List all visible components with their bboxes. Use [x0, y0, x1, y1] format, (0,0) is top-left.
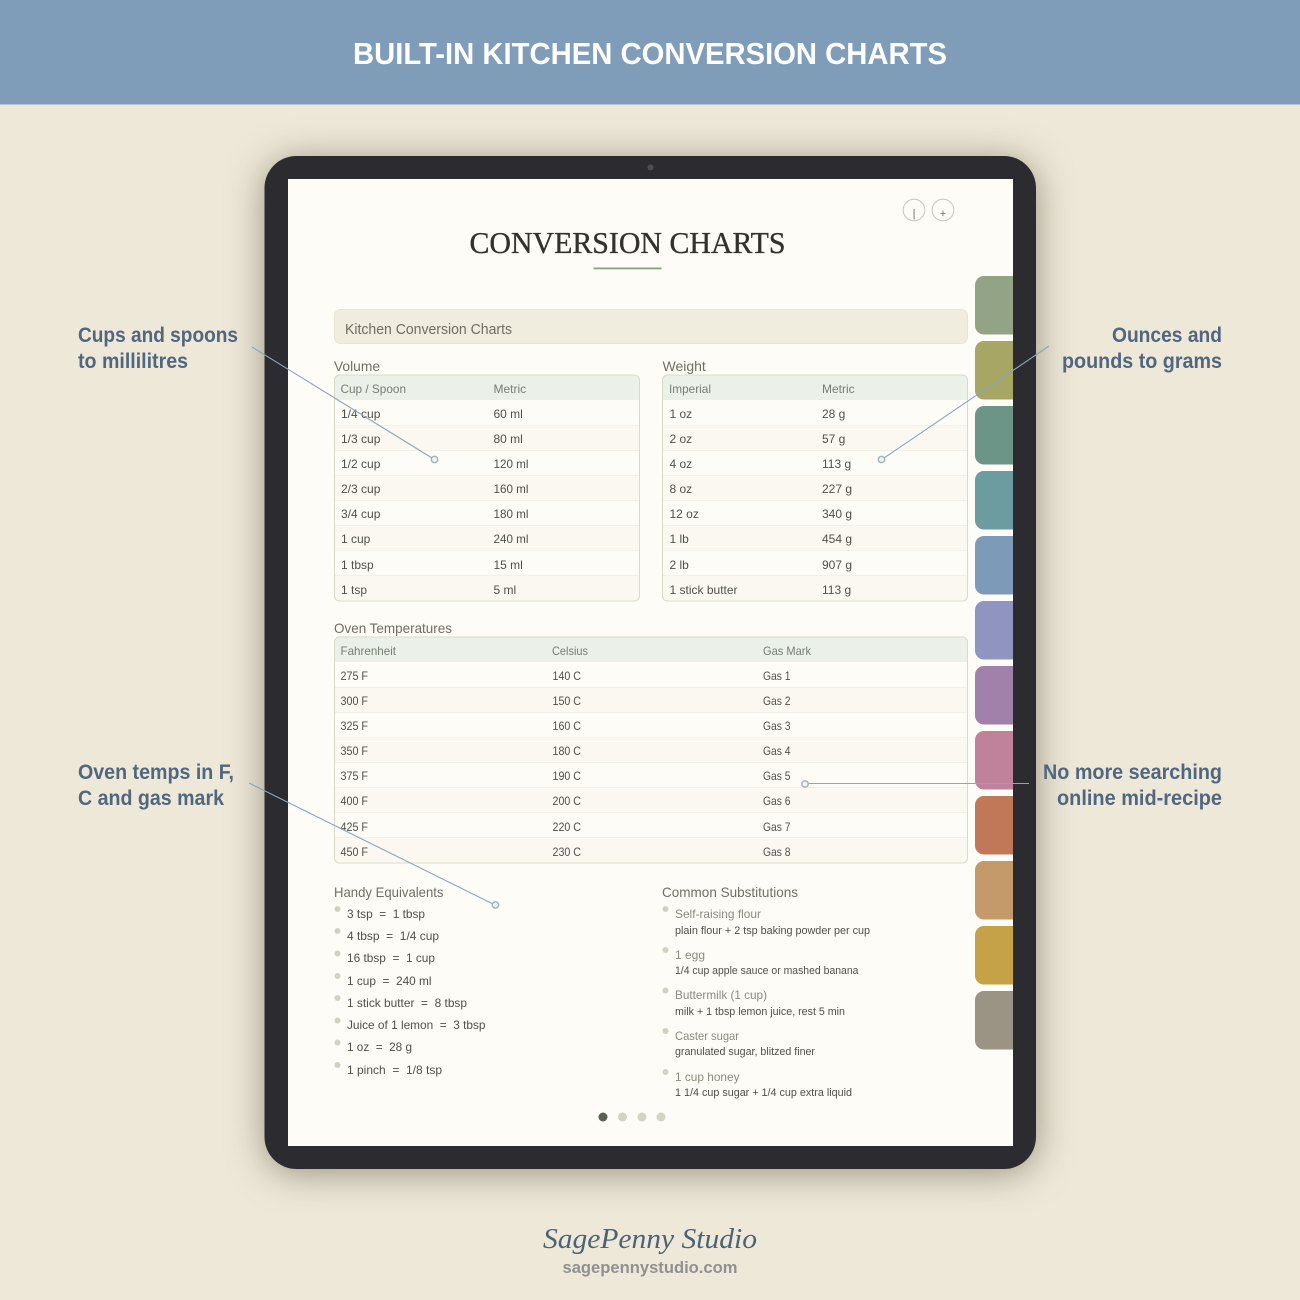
tablet drop shadow [264, 156, 1036, 1169]
weight table: 454 g [822, 532, 852, 546]
callout: no more searching: No more searching [1043, 760, 1222, 784]
weight table: 12 oz [670, 507, 699, 521]
page controls: | [913, 208, 915, 220]
oven temperatures table: 350 F [340, 744, 368, 758]
oven temperatures table: Celsius [552, 644, 588, 658]
footer url: sagepennystudio.com [562, 1258, 738, 1277]
section bar: Kitchen Conversion Charts [345, 322, 512, 338]
volume table [334, 358, 640, 601]
oven temperatures table: Gas 6 [763, 794, 791, 808]
oven temperatures table: Fahrenheit [340, 644, 397, 658]
weight table: 227 g [822, 482, 852, 496]
common substitutions list: Self-raising flour [675, 907, 761, 921]
weight table: Metric [822, 382, 855, 396]
handy equivalents list: Handy Equivalents [334, 884, 444, 900]
common substitutions list: 1 1/4 cup sugar + 1/4 cup extra liquid [675, 1087, 852, 1099]
callout: oven temps: C and gas mark [78, 786, 224, 810]
callout: cups and spoons [78, 323, 438, 463]
volume table: 1 cup [341, 532, 371, 546]
oven temperatures table: Gas 3 [763, 719, 791, 733]
callout: oven temps [78, 760, 499, 908]
callout: cups and spoons: Cups and spoons [78, 323, 238, 347]
weight table: 1 oz [670, 407, 692, 421]
oven temperatures table: 140 C [552, 669, 581, 683]
footer brand [543, 1223, 757, 1277]
volume table: 60 ml [494, 407, 523, 421]
oven temperatures table: Gas 2 [763, 694, 791, 708]
header banner [0, 0, 1300, 104]
weight table: 1 stick butter [670, 583, 738, 597]
common substitutions list: 1 egg [675, 948, 705, 962]
oven temperatures table: Gas 1 [763, 669, 791, 683]
oven temperatures table: 325 F [340, 719, 368, 733]
page controls: + [940, 208, 946, 220]
handy equivalents list: 16 tbsp = 1 cup [347, 951, 435, 965]
oven temperatures table: 300 F [340, 694, 368, 708]
common substitutions list: granulated sugar, blitzed finer [675, 1046, 815, 1058]
weight table: Weight [662, 358, 706, 374]
page controls [903, 199, 954, 221]
oven temperatures table: 200 C [552, 794, 581, 808]
oven temperatures table: Gas 4 [763, 744, 791, 758]
oven temperatures table: 220 C [552, 820, 581, 834]
volume table: 1/2 cup [341, 457, 381, 471]
common substitutions list: Common Substitutions [662, 884, 798, 900]
volume table: 3/4 cup [341, 507, 381, 521]
volume table: 5 ml [494, 583, 516, 597]
oven temperatures table: 375 F [340, 769, 368, 783]
weight table: 907 g [822, 558, 852, 572]
volume table: 1 tbsp [341, 558, 374, 572]
oven temperatures table: Oven Temperatures [334, 620, 452, 636]
handy equivalents list [334, 884, 486, 1077]
oven temperatures table: 230 C [552, 845, 581, 859]
oven temperatures table: 150 C [552, 694, 581, 708]
oven temperatures table: Gas 5 [763, 769, 791, 783]
pagination dots [598, 1112, 666, 1122]
callout: ounces and pounds: Ounces and [1112, 323, 1222, 347]
tablet device [264, 156, 1036, 1169]
weight table: 4 oz [670, 457, 692, 471]
volume table: Volume [334, 358, 380, 374]
volume table: Metric [494, 382, 526, 396]
volume table: 15 ml [494, 558, 523, 572]
common substitutions list: 1 cup honey [675, 1070, 740, 1084]
weight table [662, 358, 968, 601]
oven temperatures table [334, 620, 968, 863]
volume table: 1 tsp [341, 583, 367, 597]
weight table: 2 lb [670, 558, 689, 572]
common substitutions list: 1/4 cup apple sauce or mashed banana [675, 965, 859, 977]
page title: CONVERSION CHARTS [470, 225, 786, 260]
oven temperatures table: 400 F [340, 794, 368, 808]
handy equivalents list: 3 tsp = 1 tbsp [347, 907, 425, 921]
oven temperatures table: 425 F [340, 820, 368, 834]
oven temperatures table: 190 C [552, 769, 581, 783]
weight table: 2 oz [670, 432, 692, 446]
oven temperatures table: Gas 7 [763, 820, 791, 834]
weight table: Imperial [669, 382, 711, 396]
common substitutions list: Caster sugar [675, 1029, 739, 1043]
callout: no more searching: online mid-recipe [1057, 786, 1222, 810]
footer brand: SagePenny Studio [543, 1223, 757, 1255]
weight table: 1 lb [670, 532, 689, 546]
oven temperatures table: 450 F [340, 845, 368, 859]
oven temperatures table: Gas 8 [763, 845, 791, 859]
oven temperatures table: Gas Mark [763, 644, 812, 658]
weight table: 113 g [822, 457, 851, 471]
weight table: 28 g [822, 407, 845, 421]
callout: oven temps: Oven temps in F, [78, 760, 234, 784]
callout: ounces and pounds [878, 323, 1222, 463]
weight table: 8 oz [670, 482, 692, 496]
banner title: BUILT-IN KITCHEN CONVERSION CHARTS [353, 36, 947, 71]
common substitutions list: milk + 1 tbsp lemon juice, rest 5 min [675, 1006, 845, 1018]
oven temperatures table: 275 F [340, 669, 368, 683]
oven temperatures table: 160 C [552, 719, 581, 733]
volume table: 1/4 cup [341, 407, 381, 421]
callout: no more searching [802, 760, 1222, 810]
handy equivalents list: Juice of 1 lemon = 3 tbsp [347, 1018, 486, 1032]
oven temperatures table: 180 C [552, 744, 581, 758]
volume table: 80 ml [494, 432, 523, 446]
handy equivalents list: 1 stick butter = 8 tbsp [347, 996, 467, 1010]
handy equivalents list: 4 tbsp = 1/4 cup [347, 929, 439, 943]
common substitutions list [662, 884, 870, 1099]
handy equivalents list: 1 oz = 28 g [347, 1040, 412, 1054]
volume table: Cup / Spoon [340, 382, 406, 396]
volume table: 2/3 cup [341, 482, 381, 496]
handy equivalents list: 1 pinch = 1/8 tsp [347, 1063, 442, 1077]
weight table: 57 g [822, 432, 845, 446]
common substitutions list: Buttermilk (1 cup) [675, 988, 767, 1002]
volume table: 1/3 cup [341, 432, 381, 446]
common substitutions list: plain flour + 2 tsp baking powder per cup [675, 925, 870, 937]
volume table: 160 ml [494, 482, 528, 496]
volume table: 120 ml [494, 457, 528, 471]
volume table: 240 ml [494, 532, 528, 546]
weight table: 340 g [822, 507, 852, 521]
handy equivalents list: 1 cup = 240 ml [347, 974, 432, 988]
callout: cups and spoons: to millilitres [78, 349, 188, 373]
side tabs [975, 276, 1013, 1050]
volume table: 180 ml [494, 507, 528, 521]
camera [648, 164, 654, 170]
section bar [334, 310, 968, 344]
callout: ounces and pounds: pounds to grams [1062, 349, 1222, 373]
weight table: 113 g [822, 583, 851, 597]
